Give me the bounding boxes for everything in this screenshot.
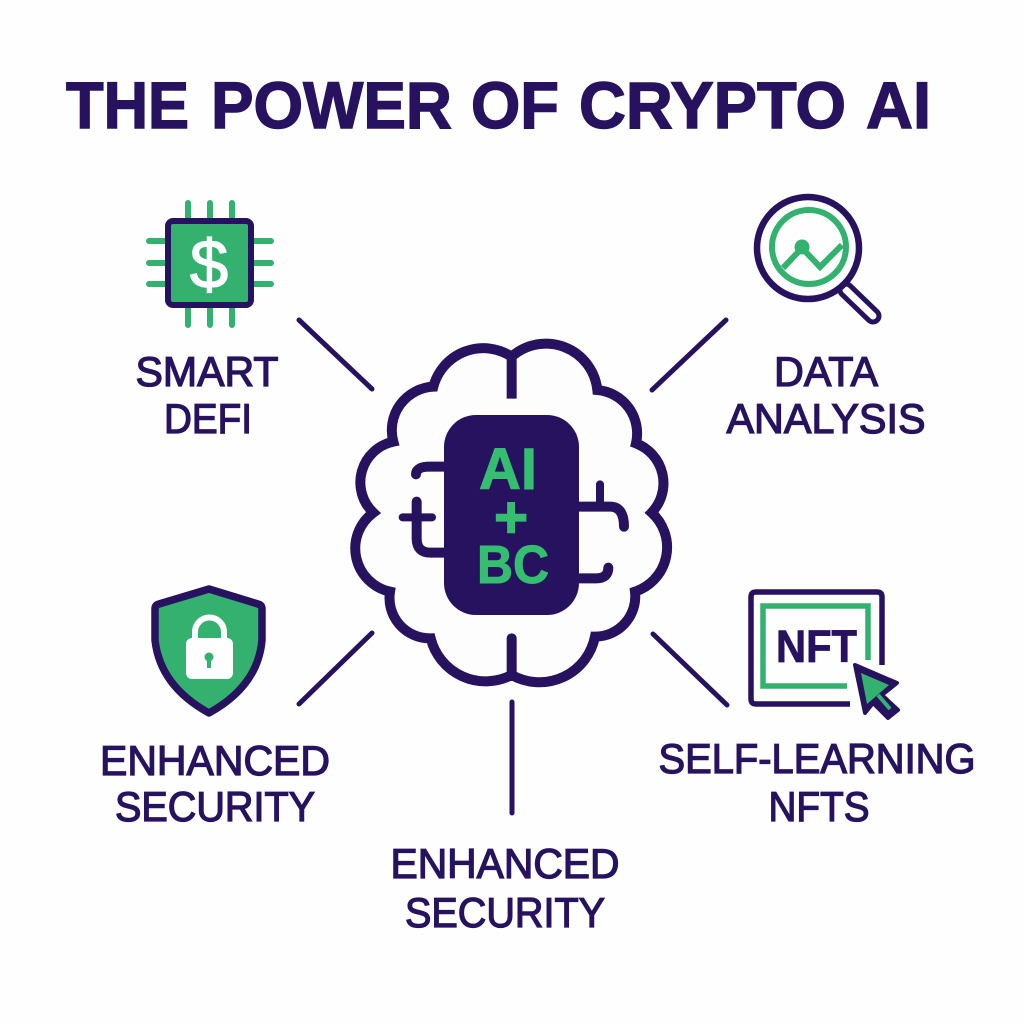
chip plus sign: +: [494, 485, 528, 550]
label: self-learning nfts: SELF-LEARNING: [658, 735, 976, 782]
title: POWER: [211, 68, 452, 142]
title: [66, 68, 931, 142]
label: smart defi: SMART: [136, 348, 278, 395]
title: CRYPTO: [579, 68, 846, 142]
chip label AI: AI: [479, 437, 537, 502]
icon: nft frame with cursor: [751, 592, 898, 718]
connector lines: [299, 320, 727, 813]
brain outline: [355, 344, 667, 682]
title: OF: [471, 68, 559, 142]
title: AI: [866, 68, 931, 142]
icon: dollar chip: [149, 203, 271, 325]
icon: shield with padlock: [155, 589, 262, 713]
icon: magnifier with chart: [757, 197, 873, 316]
label: data analysis: [726, 348, 926, 442]
label: enhanced security bottom: [390, 840, 620, 936]
panel: smart defi: [136, 203, 278, 442]
chip label BC: BC: [477, 535, 549, 595]
label: data analysis: DATA: [774, 348, 878, 395]
label: smart defi: [136, 348, 278, 442]
label: enhanced security bottom: SECURITY: [405, 889, 605, 936]
label: self-learning nfts: NFTS: [768, 783, 870, 830]
circuit traces: [403, 467, 624, 578]
label: enhanced security left: ENHANCED: [100, 737, 330, 784]
icon: central brain with AI + BC chip: [355, 344, 667, 682]
panel: self-learning nfts: [658, 592, 976, 830]
panel: enhanced security left: [100, 589, 330, 830]
label: self-learning nfts: [658, 735, 976, 830]
panel: data analysis: [726, 197, 926, 442]
icon: nft frame with cursor: NFT: [776, 621, 857, 672]
chip body: [444, 415, 579, 615]
label: enhanced security bottom: ENHANCED: [390, 840, 620, 887]
label: enhanced security left: [100, 737, 330, 830]
label: smart defi: DEFI: [164, 395, 252, 442]
icon: dollar chip: $: [190, 226, 228, 303]
label: data analysis: ANALYSIS: [726, 395, 926, 442]
title: THE: [66, 68, 189, 142]
label: enhanced security left: SECURITY: [115, 783, 315, 830]
